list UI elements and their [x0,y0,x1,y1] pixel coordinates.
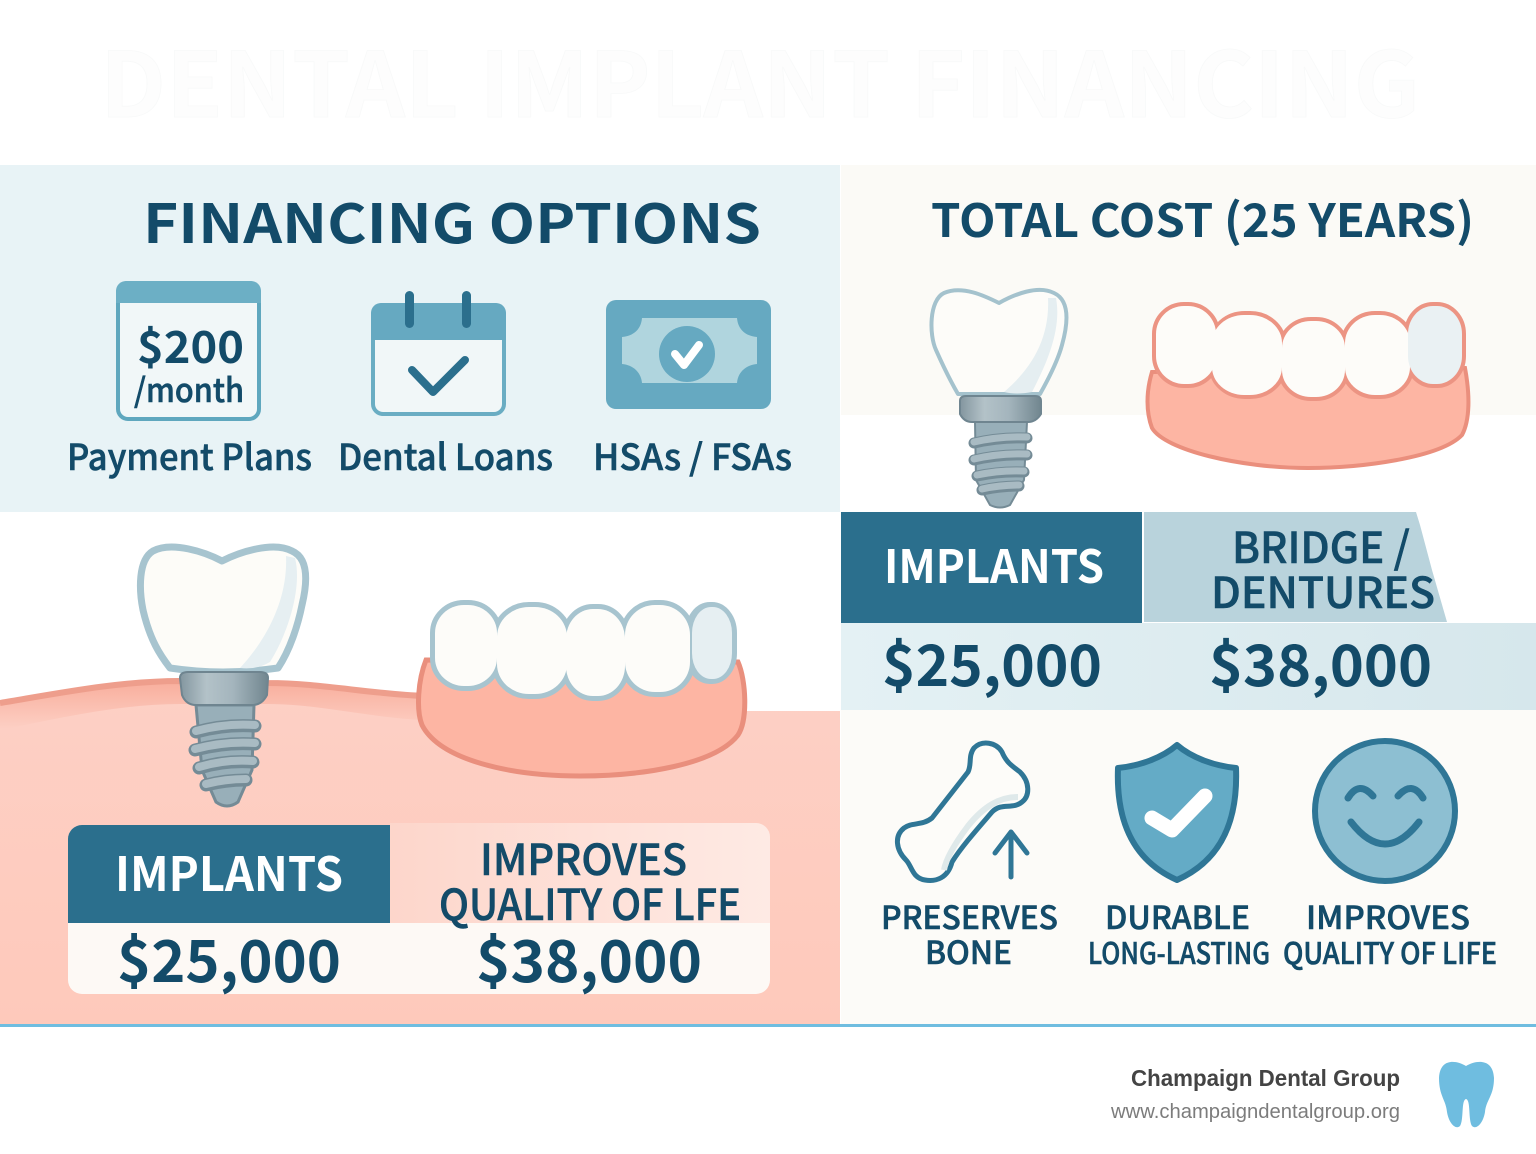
icon: payment plan card: $200 [137,312,244,376]
comparison table: implants vs bridge [841,512,1536,710]
panel: implants versus dentures illustration [0,547,840,1025]
icon: payment plan card: /month [134,364,244,412]
benefit label: durable [1088,893,1270,973]
footer divider [0,1024,1536,1027]
panel: financing options [0,165,840,512]
heading: total cost: TOTAL COST (25 YEARS) [931,185,1474,251]
gum line [0,680,425,730]
benefit label: durable: DURABLE [1105,893,1250,939]
icon: smiling face [1315,741,1455,881]
label: dental loans: Dental Loans [338,429,553,481]
comparison table: implants vs bridge: IMPLANTS [884,531,1104,597]
comparison table: pink panel: IMPROVES [480,826,687,888]
panel: total cost [841,165,1536,1025]
footer: brand text: Champaign Dental Group [1131,1065,1400,1091]
icon: calendar with check [371,291,506,414]
benefit label: improves quality of life: QUALITY OF LIFE [1283,929,1497,973]
footer: brand text [1110,1065,1400,1123]
icon: implant crown and screw [140,547,306,806]
icon: money bill with check [606,300,771,409]
label: payment plans: Payment Plans [67,429,312,481]
label: HSAs and FSAs: HSAs / FSAs [593,429,792,481]
benefit label: improves quality of life [1283,893,1497,973]
comparison table: pink panel: QUALITY OF LFE [439,871,741,933]
comparison table: pink panel [68,823,770,999]
icon: payment plan card [116,281,261,419]
comparison table: pink panel: $25,000 [117,915,341,999]
benefit label: durable: LONG-LASTING [1088,929,1270,973]
icon: denture with blue outline [419,605,745,776]
title: DENTAL IMPLANT FINANCING [100,13,1420,143]
icon: bone with up arrow [897,743,1028,880]
footer: brand text: www.champaigndentalgroup.org [1110,1101,1400,1123]
icon: shield with check [1118,745,1236,880]
comparison table: implants vs bridge: $25,000 [882,621,1102,703]
comparison table: pink panel: IMPLANTS [115,836,343,905]
benefit label: preserves bone [881,893,1058,974]
icon: implant [931,290,1067,508]
comparison table: implants vs bridge: BRIDGE / [1232,514,1410,576]
comparison table: implants vs bridge: $38,000 [1209,621,1432,703]
benefit label: improves quality of life: IMPROVES [1306,893,1470,939]
icon: denture with salmon outline [1148,306,1468,468]
heading: financing options: FINANCING OPTIONS [143,180,761,259]
comparison table: implants vs bridge: DENTURES [1211,559,1435,621]
benefit label: preserves bone: PRESERVES [881,893,1058,939]
icon: footer tooth [1439,1062,1494,1127]
benefit label: preserves bone: BONE [925,928,1012,974]
comparison table: pink panel: $38,000 [476,915,702,999]
